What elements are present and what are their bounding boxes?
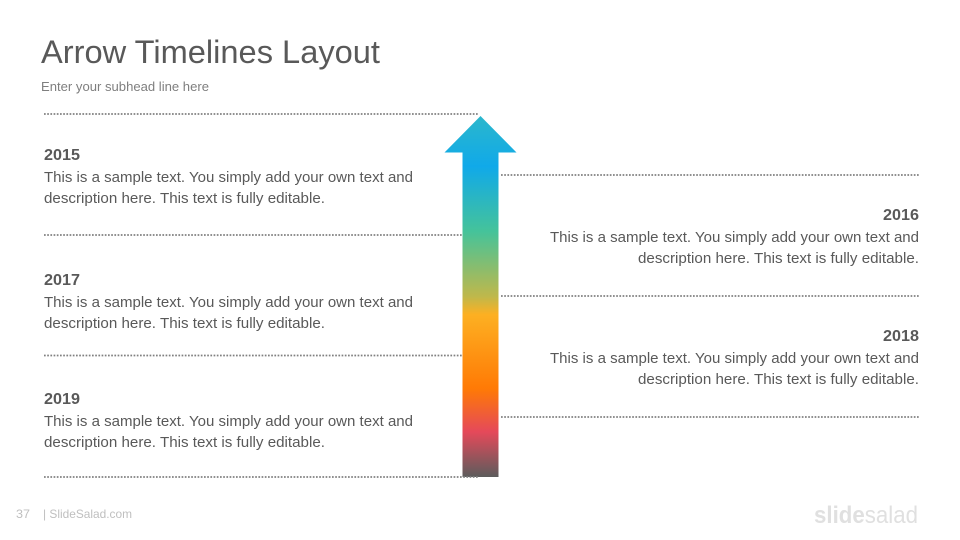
entry: 2015: This is a sample text. You simply add your own text and <box>44 170 413 186</box>
entry: 2017: This is a sample text. You simply add your own text and <box>44 295 413 311</box>
entry: 2016: 2016 <box>883 207 919 224</box>
logo wordmark: slidesalad <box>814 502 918 529</box>
entry: 2019: This is a sample text. You simply add your own text and <box>44 414 413 430</box>
entry: 2018: 2018 <box>883 328 919 345</box>
arrow: gradient timeline <box>444 116 516 477</box>
entry: 2017: description here. This text is fully editable. <box>44 316 325 332</box>
dotted separators <box>44 114 919 477</box>
entry: 2018 <box>550 328 919 388</box>
entry: 2019 <box>44 391 413 451</box>
entry: 2016: This is a sample text. You simply add your own text and <box>550 230 919 246</box>
entry: 2016: description here. This text is fully editable. <box>638 251 919 267</box>
entry: 2015 <box>44 147 413 207</box>
entry: 2015: description here. This text is fully editable. <box>44 191 325 207</box>
title: Arrow Timelines Layout <box>41 34 380 70</box>
entry: 2019: 2019 <box>44 391 80 408</box>
entry: 2019: description here. This text is fully editable. <box>44 435 325 451</box>
subtitle: Enter your subhead line here <box>41 80 209 94</box>
footer source: | SlideSalad.com <box>43 507 132 521</box>
entry: 2017: 2017 <box>44 272 80 289</box>
entry: 2018: description here. This text is fully editable. <box>638 372 919 388</box>
page number: 37 <box>16 507 30 521</box>
entry: 2018: This is a sample text. You simply add your own text and <box>550 351 919 367</box>
entry: 2016 <box>550 207 919 267</box>
entry: 2017 <box>44 272 413 332</box>
entry: 2015: 2015 <box>44 147 80 164</box>
